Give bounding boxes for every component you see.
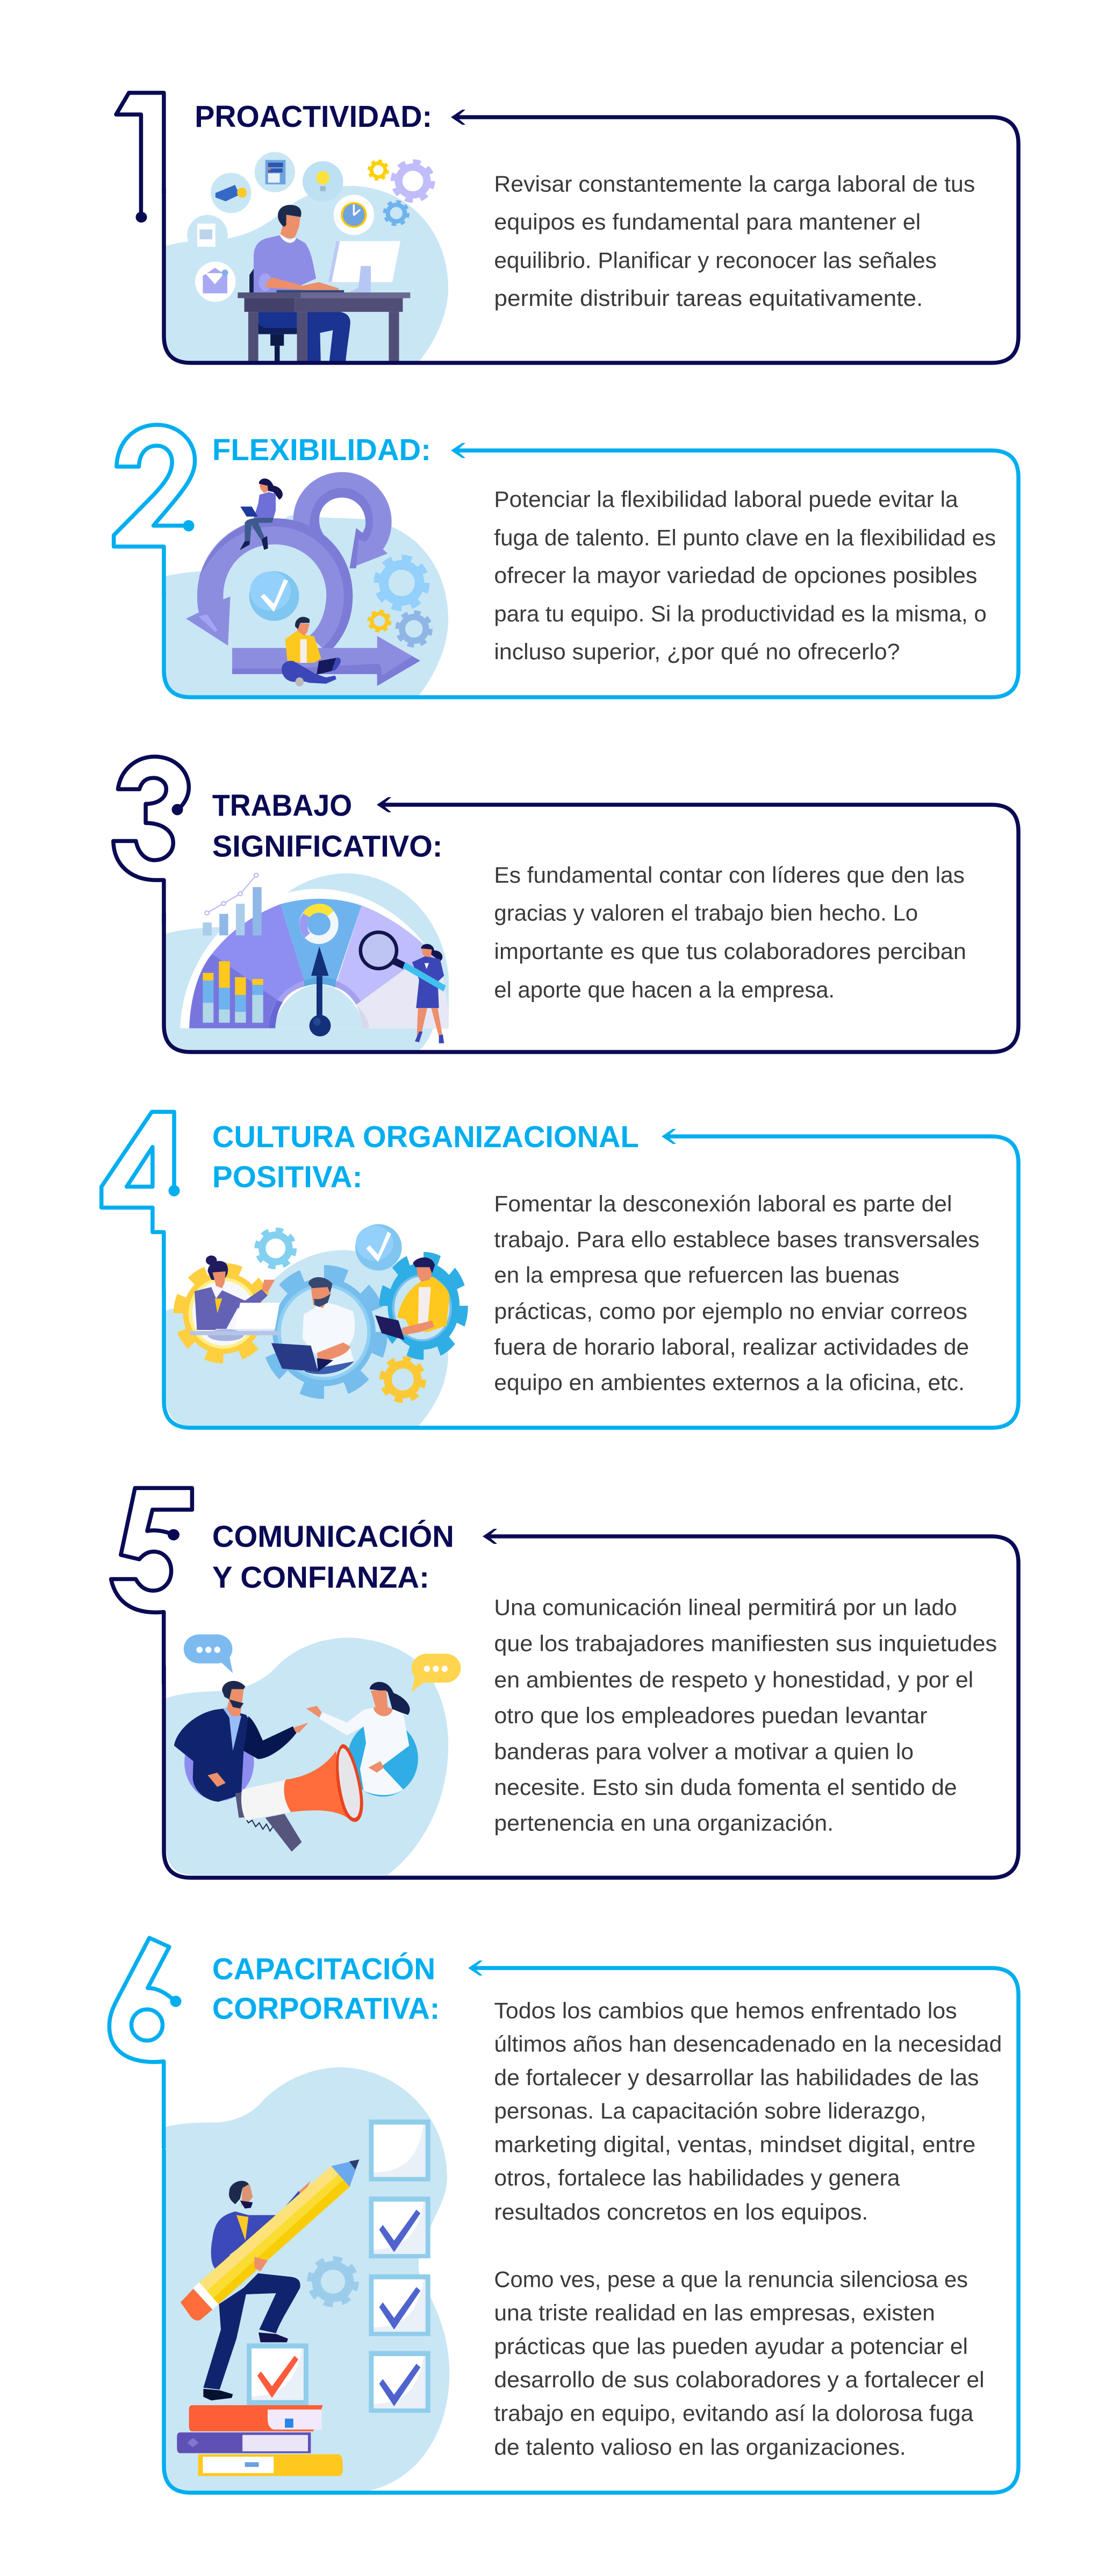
body text: fuga de talento. El punto clave en la flexibilidad es: [494, 525, 996, 550]
body text: desarrollo de sus colaboradores y a fortalecer el: [494, 2367, 985, 2392]
body text: el aporte que hacen a la empresa.: [494, 977, 835, 1003]
panel: 3 trabajo significativo: [113, 756, 1018, 1052]
body text: Como ves, pese a que la renuncia silenciosa es: [494, 2266, 968, 2292]
heading: TRABAJO: [212, 789, 352, 822]
body text: prácticas que las pueden ayudar a potenciar el: [494, 2334, 968, 2359]
illustration: gauge, charts and woman with magnifier: [164, 873, 449, 1050]
body text: [494, 171, 975, 311]
body text: necesite. Esto sin duda fomenta el sentido de: [494, 1774, 957, 1800]
body text: Es fundamental contar con líderes que den las: [494, 862, 965, 888]
heading: CULTURA ORGANIZACIONAL: [212, 1120, 639, 1154]
heading: CAPACITACIÓN: [212, 1952, 435, 1986]
body text: otros, fortalece las habilidades y genera: [494, 2165, 900, 2191]
heading: [212, 1520, 454, 1594]
body text: [494, 1191, 979, 1395]
body text: pertenencia en una organización.: [494, 1810, 834, 1835]
panel: 1 proactividad: [116, 93, 1018, 363]
body text: en la empresa que refuercen las buenas: [494, 1262, 899, 1287]
body text: de fortalecer y desarrollar las habilidades de las: [494, 2065, 979, 2090]
body text: trabajo. Para ello establece bases transversales: [494, 1227, 979, 1252]
heading: FLEXIBILIDAD:: [212, 433, 431, 467]
body text: [494, 486, 996, 664]
body text: equilibrio. Planificar y reconocer las señales: [494, 247, 937, 273]
illustration: three workers in gears: [166, 1224, 462, 1426]
body text: [494, 1594, 997, 1835]
body text: equipos es fundamental para mantener el: [494, 209, 921, 234]
body text: otro que los empleadores puedan levantar: [494, 1702, 928, 1728]
illustration: man with pencil, checklist and books: [166, 2067, 449, 2491]
body text: Una comunicación lineal permitirá por un lado: [494, 1594, 957, 1620]
frame with numeral 4 and arrow: [102, 1112, 1018, 1428]
frame with numeral 3 and arrow: [113, 756, 1018, 1052]
body text: Todos los cambios que hemos enfrentado los: [494, 1998, 957, 2023]
body text: resultados concretos en los equipos.: [494, 2199, 868, 2224]
body text: equipo en ambientes externos a la oficina, etc.: [494, 1370, 965, 1395]
body text: banderas para volver a motivar a quien lo: [494, 1739, 914, 1764]
panel: 5 comunicacion y confianza: [111, 1488, 1018, 1878]
body text: últimos años han desencadenado en la necesidad: [494, 2031, 1002, 2057]
illustration: two people talking with megaphone: [166, 1634, 461, 1875]
body text: Fomentar la desconexión laboral es parte del: [494, 1191, 952, 1216]
body text: prácticas, como por ejemplo no enviar correos: [494, 1298, 967, 1323]
frame with numeral 6 and arrow: [109, 1938, 1018, 2493]
body text: ofrecer la mayor variedad de opciones posibles: [494, 563, 977, 588]
frame with numeral 5 and arrow: [111, 1488, 1018, 1878]
body text: [494, 862, 966, 1003]
body text: en ambientes de respeto y honestidad, y por el: [494, 1667, 973, 1692]
body text: incluso superior, ¿por qué no ofrecerlo?: [494, 639, 900, 664]
illustration: circular arrows with two workers: [164, 472, 448, 695]
body text: personas. La capacitación sobre liderazgo,: [494, 2098, 926, 2123]
body text: [494, 1998, 1002, 2460]
body text: marketing digital, ventas, mindset digital, entre: [494, 2131, 975, 2157]
frame with numeral 1 and arrow: [116, 93, 1018, 363]
panel: 6 capacitacion corporativa: [109, 1938, 1018, 2493]
heading: CORPORATIVA:: [212, 1992, 440, 2026]
body text: Potenciar la flexibilidad laboral puede evitar la: [494, 486, 958, 512]
body text: trabajo en equipo, evitando así la dolorosa fuga: [494, 2400, 974, 2425]
body text: una triste realidad en las empresas, existen: [494, 2300, 935, 2325]
heading: [212, 1952, 440, 2026]
heading: POSITIVA:: [212, 1160, 362, 1194]
heading: [212, 789, 442, 863]
body text: de talento valioso en las organizaciones.: [494, 2435, 906, 2460]
body text: importante es que tus colaboradores perciban: [494, 939, 966, 964]
body text: para tu equipo. Si la productividad es la misma, o: [494, 601, 987, 626]
heading: [212, 1120, 639, 1194]
heading: COMUNICACIÓN: [212, 1520, 454, 1554]
body text: permite distribuir tareas equitativamente.: [494, 285, 923, 311]
body text: Revisar constantemente la carga laboral de tus: [494, 171, 975, 197]
frame with numeral 2 and arrow: [114, 425, 1018, 697]
heading: SIGNIFICATIVO:: [212, 829, 442, 863]
body text: gracias y valoren el trabajo bien hecho. Lo: [494, 900, 918, 926]
heading: Y CONFIANZA:: [212, 1560, 429, 1594]
body text: fuera de horario laboral, realizar actividades de: [494, 1334, 969, 1359]
body text: que los trabajadores manifiesten sus inquietudes: [494, 1631, 997, 1656]
panel: 4 cultura organizacional: [102, 1112, 1018, 1428]
illustration: person at desk with idea bubbles: [164, 152, 448, 362]
heading: PROACTIVIDAD:: [195, 99, 432, 133]
panel: 2 flexibilidad: [114, 425, 1018, 697]
